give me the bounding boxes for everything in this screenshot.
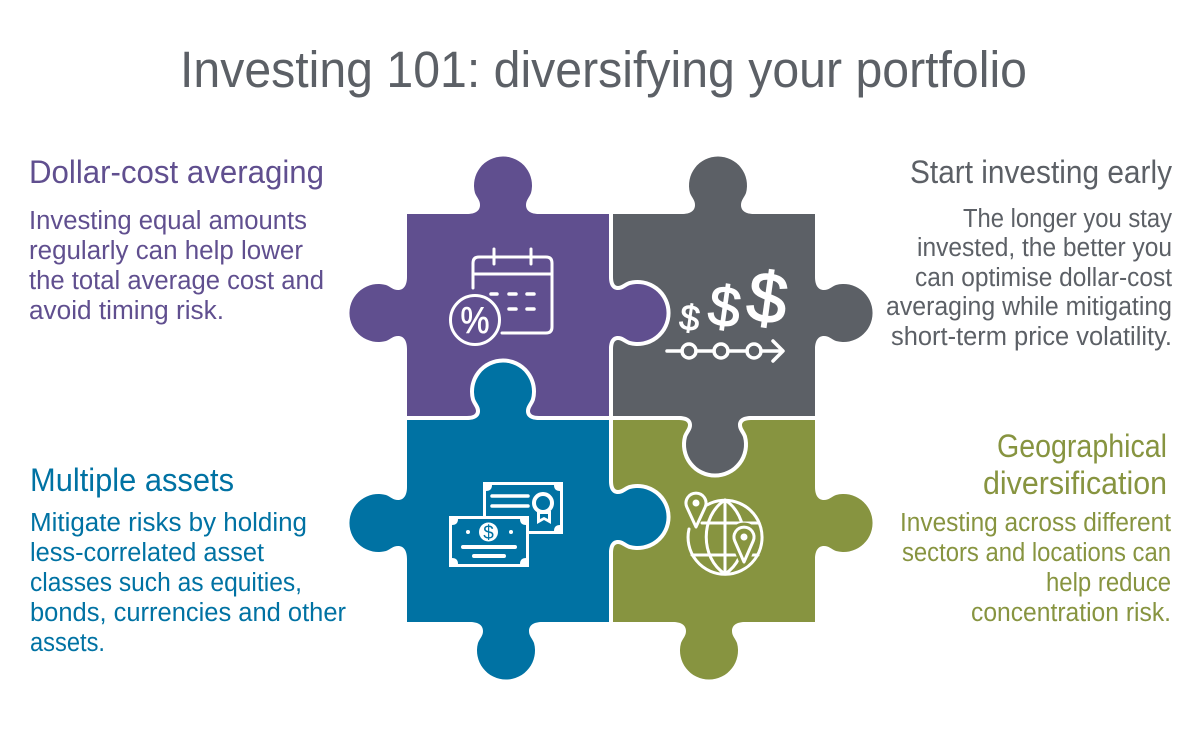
text block: sectors and locations can (902, 539, 1171, 567)
text block: bonds, currencies and other (30, 599, 346, 627)
heading: Dollar-cost averaging (29, 154, 324, 190)
icon: growing dollars on timeline: $ (742, 257, 792, 341)
heading: Start investing early (910, 154, 1172, 190)
text block: help reduce (1046, 569, 1171, 597)
puzzle piece: blue (349, 362, 667, 680)
heading: diversification (983, 465, 1167, 501)
text block: can optimise dollar-cost (915, 264, 1172, 292)
title: Investing 101: diversifying your portfolio (180, 41, 1027, 98)
text block: avoid timing risk. (29, 297, 224, 325)
text block: the total average cost and (29, 267, 324, 295)
panel: multiple assets (30, 462, 346, 657)
text block: invested, the better you (917, 234, 1172, 262)
text block (29, 207, 324, 325)
text block: regularly can help lower (29, 237, 304, 265)
text block: Investing equal amounts (29, 207, 307, 235)
icon: globe with map pins (686, 493, 762, 574)
text block: Mitigate risks by holding (30, 509, 307, 537)
puzzle piece: purple (349, 156, 667, 416)
icon: certificate and banknote: $ (483, 523, 494, 544)
icon: growing dollars on timeline: $ (704, 273, 745, 341)
heading: Geographical (997, 428, 1167, 464)
icon: growing dollars on timeline: $ (677, 296, 703, 339)
text block: short-term price volatility. (891, 323, 1172, 351)
text block (900, 509, 1171, 627)
puzzle piece: gray (613, 156, 873, 474)
text block: assets. (30, 629, 105, 657)
panel: puzzle graphic (349, 156, 873, 680)
text block (886, 205, 1172, 351)
text block: averaging while mitigating (886, 293, 1172, 321)
icon: calendar with percent (450, 249, 552, 344)
puzzle piece: green (613, 420, 873, 680)
icon: calendar with percent: % (460, 300, 490, 341)
text block: classes such as equities, (30, 569, 302, 597)
panel: dollar-cost averaging (29, 154, 324, 325)
text block: Investing across different (900, 509, 1171, 537)
heading: Multiple assets (30, 462, 234, 498)
heading (983, 428, 1167, 501)
panel: geographical diversification (900, 428, 1171, 627)
text block: The longer you stay (963, 205, 1172, 233)
icon: certificate and banknote (449, 482, 563, 567)
icon: growing dollars on timeline (667, 257, 792, 361)
text block: concentration risk. (971, 599, 1171, 627)
text block (30, 509, 346, 657)
text block: less-correlated asset (30, 539, 264, 567)
panel: start investing early (886, 154, 1172, 351)
